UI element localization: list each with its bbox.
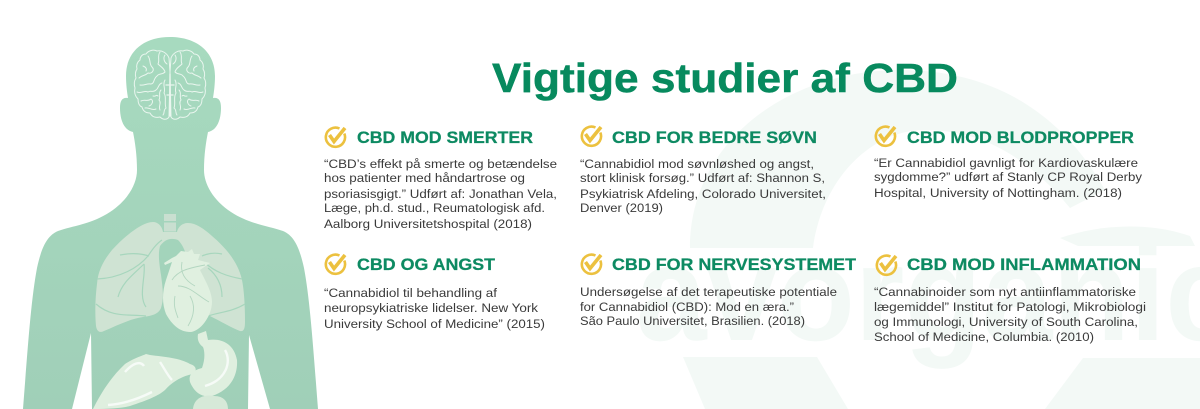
panel: CBD mod inflammation bbox=[874, 255, 1146, 344]
human body silhouette bbox=[23, 37, 318, 409]
study text: nervesystemet bbox=[580, 285, 837, 328]
panel: CBD for nervesystemet bbox=[580, 255, 857, 328]
icon: check mark bbox=[326, 255, 345, 274]
background watermark logo bbox=[636, 70, 1200, 409]
study text: inflammation: lægemiddel” Institut for Patologi, Mikrobiologi bbox=[874, 300, 1146, 314]
icon: liver bbox=[93, 354, 196, 409]
study text: blodpropper: “Er Cannabidiol gavnligt for Kardiovaskulære bbox=[874, 156, 1138, 170]
study text: søvn: Denver (2019) bbox=[580, 201, 663, 215]
icon: check mark bbox=[582, 255, 601, 274]
study text: smerter: psoriasisgigt.” Udført af: Jonathan Vela, bbox=[324, 187, 557, 201]
study text: angst: “Cannabidiol til behandling af bbox=[324, 286, 498, 300]
heading: CBD mod smerter: CBD MOD SMERTER bbox=[357, 128, 533, 147]
study text: blodpropper: sygdomme?” udført af Stanly CP Royal Derby bbox=[874, 170, 1143, 184]
icon: check mark bbox=[876, 127, 895, 146]
icon: check mark bbox=[877, 256, 896, 275]
panel: CBD mod smerter bbox=[324, 128, 557, 231]
study text: blodpropper bbox=[874, 156, 1143, 200]
icon: trachea bbox=[164, 214, 176, 232]
heading: CBD for nervesystemet: CBD FOR NERVESYSTEMET bbox=[612, 255, 857, 274]
study text: søvn bbox=[580, 157, 826, 215]
study text: nervesystemet: São Paulo Universitet, Brasilien. (2018) bbox=[580, 314, 805, 328]
heading: CBD for bedre søvn: CBD FOR BEDRE SØVN bbox=[612, 128, 817, 147]
study text: smerter: Læge, ph.d. stud., Reumatologisk afd. bbox=[324, 201, 545, 215]
icon: brain bbox=[134, 50, 206, 119]
study text: søvn: “Cannabidiol mod søvnløshed og angst, bbox=[580, 157, 814, 171]
panel: CBD og angst bbox=[324, 255, 545, 331]
icon: check mark bbox=[326, 128, 345, 147]
panel: CBD for bedre søvn bbox=[580, 127, 826, 215]
study text: smerter: “CBD’s effekt på smerte og betændelse bbox=[324, 157, 557, 171]
icon: stomach bbox=[190, 331, 237, 409]
study text: søvn: Psykiatrisk Afdeling, Colorado Universitet, bbox=[580, 187, 826, 201]
study text: nervesystemet: Undersøgelse af det terapeutiske potentiale bbox=[580, 285, 837, 299]
study text: inflammation: og Immunologi, University of South Carolina, bbox=[874, 315, 1138, 329]
study text: angst bbox=[324, 286, 545, 331]
study text: nervesystemet: for Cannabidiol (CBD): Mod en æra.” bbox=[580, 300, 794, 314]
heading: CBD og angst: CBD OG ANGST bbox=[357, 255, 496, 274]
panel: CBD mod blodpropper bbox=[874, 127, 1143, 200]
study text: inflammation: School of Medicine, Columbia. (2010) bbox=[874, 330, 1094, 344]
study text: søvn: stort klinisk forsøg.” Udført af: Shannon S, bbox=[580, 171, 825, 185]
study text: blodpropper: Hospital, University of Nottingham. (2018) bbox=[874, 186, 1122, 200]
icon: lungs bbox=[95, 222, 245, 332]
study text: inflammation bbox=[874, 285, 1146, 344]
icon: heart bbox=[163, 249, 212, 332]
heading: CBD mod blodpropper: CBD MOD BLODPROPPER bbox=[907, 128, 1134, 147]
study text: smerter: hos patienter med håndartrose og bbox=[324, 171, 525, 185]
study text: smerter: Aalborg Universitetshospital (2018) bbox=[324, 217, 532, 231]
heading: CBD mod inflammation: CBD MOD INFLAMMATION bbox=[907, 255, 1141, 274]
icon: check mark bbox=[582, 127, 601, 146]
study text: inflammation: “Cannabinoider som nyt antiinflammatoriske bbox=[874, 285, 1136, 299]
study text: angst: neuropsykiatriske lidelser. New York bbox=[324, 301, 539, 315]
study text: angst: University School of Medicine” (2015) bbox=[324, 317, 545, 331]
title: Vigtige studier af CBD bbox=[492, 55, 958, 101]
study text: smerter bbox=[324, 157, 557, 231]
